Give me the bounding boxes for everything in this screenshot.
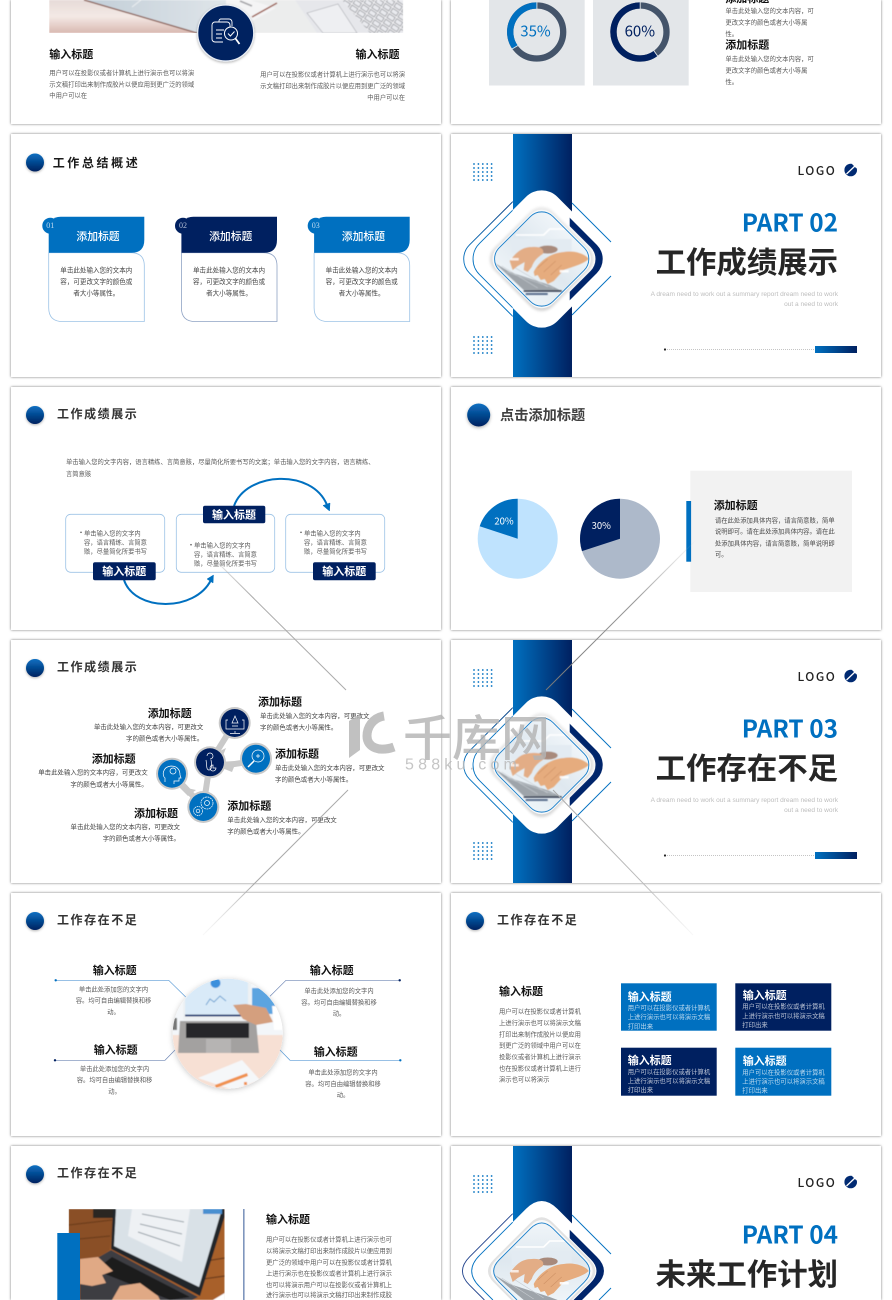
box 2: 容，语言精练、言简意 [194, 549, 257, 558]
card 03: 03 [312, 221, 320, 230]
box: bottom right: 用户可以在投影仪或者计算机 [742, 1067, 825, 1076]
text block: 以将演示文稿打印出来制作成胶片以便应用到 [266, 1246, 392, 1254]
item: top left: 容。均可自由编辑替换和移 [76, 995, 152, 1004]
icon: title bullet [26, 154, 44, 172]
item: top right: 添加标题 [258, 693, 302, 709]
icon: magnifier [248, 750, 264, 767]
text block: 进行演示也可以将演示文稿打印出来制作成胶 [266, 1290, 393, 1298]
item: middle right: 字的颜色或者大小等属性。 [275, 774, 352, 783]
item: top right [301, 962, 377, 1017]
box: top right: 用户可以在投影仪或者计算机 [742, 1001, 825, 1010]
box: bottom right: 打印出来 [742, 1085, 768, 1094]
title: 工作总结概述 [53, 154, 140, 171]
logo text: LOGO [798, 1174, 836, 1191]
icon: head gear [163, 766, 181, 784]
item: bottom left: 字的颜色或者大小等属性。 [103, 833, 180, 842]
item: middle right: 单击此处输入您的文本内容，可更改文 [275, 762, 385, 772]
box 1: 赅，尽量简化所要书写 [84, 546, 147, 555]
item: top right: 输入标题 [310, 962, 354, 978]
photo: laptop on desk [45, 0, 403, 33]
part label: PART 04 [742, 1216, 838, 1252]
item: top left [76, 962, 152, 1016]
box: bottom right: 上进行演示也可以将演示文稿 [742, 1076, 825, 1085]
box: bottom right [735, 1048, 831, 1096]
callout line: bottom left [54, 1050, 175, 1062]
heading: 输入标题 [499, 983, 543, 999]
text block: 到更广泛的领域中用户可以在 [499, 1040, 581, 1049]
item: top right: 单击此处添加您的文字内 [304, 986, 374, 994]
label 1 [93, 562, 156, 580]
callout box: 请在此处添加具体内容，请言简意赅，简单 [715, 515, 835, 524]
text block one: 性。 [726, 28, 738, 38]
part label: PART 02 [742, 204, 838, 240]
item: top right [258, 693, 370, 731]
panel: shortcomings with laptop photo [11, 1146, 441, 1300]
item: bottom left [77, 1041, 153, 1095]
divider [243, 1209, 245, 1300]
box 2 [176, 514, 275, 572]
text block one: 单击此处输入您的文本内容，可 [726, 6, 814, 14]
chart: 20% pie: 20% [494, 513, 514, 527]
heading: 输入标题 [266, 1211, 310, 1227]
item: bottom right: 单击此处添加您的文字内 [308, 1067, 378, 1076]
item: bottom right: 动。 [337, 1090, 349, 1098]
box: top left [621, 983, 717, 1031]
item: bottom left [71, 805, 181, 842]
item: top left: 字的颜色或者大小等属性。 [126, 733, 203, 742]
panel: section divider PART 03 [451, 640, 881, 883]
item: top left: 动。 [107, 1006, 120, 1016]
subtitle: A dream need to work out a summary report dream need to work [651, 796, 839, 804]
box 2: 单击输入您的文字内 [194, 540, 251, 549]
card 02: 者大小等属性。 [206, 287, 252, 297]
item: middle right: 添加标题 [275, 745, 319, 761]
photo: laptop on wood table [69, 1209, 225, 1300]
item: bottom left: 单击此处添加您的文字内 [80, 1064, 149, 1072]
text block: 上进行演示也在投影仪或者计算机上进行演示 [266, 1268, 392, 1277]
card 02 [175, 217, 277, 322]
subtitle: A dream need to work out a summary report dream need to work [651, 290, 839, 298]
text block two: 性。 [726, 76, 738, 86]
box: top left: 输入标题 [628, 988, 672, 1004]
panel: shortcomings with four boxes [451, 893, 881, 1136]
item: bottom left: 单击此处输入您的文本内容，可更改文 [71, 822, 181, 830]
card 01: 者大小等属性。 [73, 287, 119, 297]
card 01: 添加标题 [76, 228, 120, 244]
panel: work results with arrows [11, 387, 441, 630]
callout box [686, 471, 852, 592]
item: bottom right: 输入标题 [314, 1044, 358, 1060]
box: top left: 上进行演示也可以将演示文稿 [628, 1012, 711, 1020]
item: middle left [38, 750, 148, 788]
subtitle: out a need to work [784, 806, 839, 814]
panel: pie charts [451, 387, 881, 630]
title: 工作存在不足 [57, 911, 138, 928]
diamond photo artwork [455, 640, 858, 883]
item: bottom left: 容。均可自由编辑替换和移 [77, 1074, 153, 1084]
item: bottom right: 容。均可自由编辑替换和移 [305, 1078, 381, 1088]
box 1: 单击输入您的文字内 [84, 528, 141, 537]
panel: shortcomings with round photo [11, 893, 441, 1136]
text block: 用户可以在投影仪或者计算机上进行演示也可 [266, 1234, 392, 1243]
box: top left: 打印出来 [628, 1021, 654, 1030]
hub diagram [156, 707, 272, 823]
callout line: bottom right [280, 1050, 401, 1062]
box: top right: 输入标题 [743, 987, 787, 1003]
text block left: 用户可以在投影仪或者计算机上进行演示也可以将演 [49, 68, 194, 76]
intro text: 单击输入您的文字内容，语言精练、言简意赅，尽量简化所要书写的文案；单击输入您的文字内容，语言精练、 [66, 456, 375, 466]
box 3 [286, 514, 385, 572]
label 1: 输入标题 [102, 563, 146, 579]
icon: gears [194, 797, 213, 816]
item: bottom right: 单击此处输入您的文本内容，可更改文 [227, 814, 337, 824]
text block: 也在投影仪或者计算机上进行 [499, 1063, 582, 1072]
item: top left: 单击此处输入您的文本内容，可更改文 [94, 722, 204, 730]
panel: work results hub diagram [11, 640, 441, 883]
item: bottom left: 动。 [108, 1086, 121, 1095]
callout line: top right [270, 979, 401, 996]
text block: 用户可以在投影仪或者计算机 [499, 1006, 582, 1015]
panel: partial donut slide, top right [451, 0, 881, 124]
watermark: brand mark and text: 588ku.com [405, 756, 521, 774]
icon: title bullet [26, 659, 44, 677]
box 1: 容，语言精练、言简意 [84, 537, 147, 546]
chart: 30% pie [580, 499, 660, 579]
item: bottom right [305, 1044, 381, 1098]
chart: 20% pie [478, 499, 558, 579]
box: bottom left [621, 1048, 717, 1096]
section title: 工作成绩展示 [656, 238, 838, 282]
item: top right: 字的颜色或者大小等属性。 [260, 722, 337, 731]
icon: title bullet [466, 912, 484, 930]
box: bottom left: 用户可以在投影仪或者计算机 [628, 1066, 711, 1076]
logo text: LOGO [798, 668, 836, 685]
icon: screen [226, 716, 244, 734]
diamond photo artwork [462, 1146, 858, 1300]
panel: partial report slide, top left [11, 0, 441, 124]
item: middle right [275, 745, 385, 783]
panel: work summary overview [11, 134, 441, 377]
text block: 打印出来制作成胶片以便应用 [499, 1029, 581, 1038]
box: top right: 上进行演示也可以将演示文稿 [742, 1010, 825, 1020]
card 03: 添加标题 [342, 228, 385, 244]
card 03: 者大小等属性。 [339, 287, 385, 297]
chart: 30% pie: 30% [592, 518, 611, 532]
item: top left [94, 705, 204, 742]
item: top left: 单击此处添加您的文字内 [79, 984, 148, 993]
item: middle left: 字的颜色或者大小等属性。 [70, 779, 148, 788]
label 3: 输入标题 [322, 563, 366, 579]
card 03: 容，可更改文字的颜色或 [326, 276, 398, 286]
text block: 也可以将演示用户可以在投影仪或者计算机上 [266, 1280, 392, 1288]
text block one: 更改文字的颜色或者大小等属 [726, 17, 807, 26]
heading right: 输入标题 [356, 46, 400, 62]
text block: 投影仪或者计算机上进行演示 [499, 1052, 581, 1060]
text block: 演示也可以将演示 [499, 1074, 549, 1083]
box 3: 容，语言精练、言简意 [304, 537, 367, 546]
text block: 上进行演示也可以将演示文稿 [499, 1018, 581, 1026]
title: 工作成绩展示 [57, 405, 138, 422]
heading left: 输入标题 [49, 46, 93, 62]
icon: title bullet [467, 403, 490, 427]
card 03: 单击此处输入您的文本内 [326, 265, 398, 275]
intro text: 言简意赅 [66, 468, 92, 478]
part label: PART 03 [742, 710, 838, 746]
text block right: 中用户可以在 [367, 92, 405, 101]
chart: 60% donut: 60% [625, 20, 655, 42]
text block two: 更改文字的颜色或者大小等属 [726, 65, 807, 74]
title: 工作成绩展示 [57, 658, 138, 675]
watermark: diagonal lines [203, 540, 696, 935]
box 1 [66, 514, 165, 572]
card 01: 单击此处输入您的文本内 [60, 265, 132, 275]
section title: 工作存在不足 [656, 744, 838, 788]
text block right: 示文稿打印出来制作成胶片以便应用到更广泛的领域 [260, 80, 406, 90]
text block left: 中用户可以在 [49, 90, 87, 99]
title: 工作存在不足 [497, 911, 578, 928]
text block left: 示文稿打印出来制作成胶片以便应用到更广泛的领域 [49, 79, 195, 88]
item: middle left: 单击此处输入您的文本内容，可更改文 [38, 767, 148, 776]
heading two: 添加标题 [725, 36, 769, 52]
item: top left: 添加标题 [148, 705, 192, 721]
item: middle left: 添加标题 [92, 750, 136, 766]
diamond photo artwork [455, 134, 858, 377]
watermark: brand mark and text: 千库网 [403, 700, 550, 770]
callout box: 添加标题 [714, 497, 758, 513]
text block: 更广泛的领域中用户可以在投影仪或者计算机 [266, 1257, 393, 1266]
card 01 [42, 217, 144, 322]
subtitle: out a need to work [784, 300, 839, 308]
title: 工作存在不足 [57, 1164, 138, 1181]
item: bottom right: 添加标题 [227, 798, 271, 814]
icon: person chart [206, 753, 216, 771]
item: top right: 容。均可自由编辑替换和移 [301, 997, 377, 1006]
panel: section divider PART 04 [451, 1146, 881, 1300]
box: bottom left: 上进行演示也可以将演示文稿 [628, 1076, 711, 1084]
text block right: 用户可以在投影仪或者计算机上进行演示也可以将演 [260, 69, 405, 78]
chart: 35% donut [489, 0, 585, 86]
item: bottom left: 添加标题 [134, 805, 178, 821]
card 02: 单击此处输入您的文本内 [193, 265, 265, 275]
box 3: 单击输入您的文字内 [304, 528, 361, 537]
box: bottom left: 打印出来 [628, 1084, 654, 1094]
box: bottom left: 输入标题 [628, 1052, 672, 1068]
box: top left: 用户可以在投影仪或者计算机 [628, 1002, 711, 1012]
icon: document with magnifier [198, 5, 254, 61]
icon: title bullet [26, 406, 44, 424]
title: 点击添加标题 [500, 405, 585, 425]
callout box: 可。 [715, 549, 728, 558]
card 02: 容，可更改文字的颜色或 [193, 276, 265, 286]
card 02: 02 [179, 221, 187, 230]
item: bottom left: 输入标题 [94, 1041, 138, 1057]
chart: 60% donut [593, 0, 689, 86]
card 03 [308, 217, 410, 322]
card 01: 容，可更改文字的颜色或 [60, 276, 133, 286]
photo: laptop in circle [170, 975, 286, 1095]
text block two: 单击此处输入您的文本内容，可 [726, 54, 814, 62]
icon: title bullet [26, 1165, 44, 1183]
box: top right [735, 983, 831, 1031]
label 2 [203, 506, 265, 523]
label 3 [313, 562, 376, 580]
box 2: 赅，尽量简化所要书写 [194, 558, 257, 567]
section title: 未来工作计划 [656, 1250, 838, 1294]
accent bar [57, 1233, 80, 1300]
arrow: lower curve [124, 575, 214, 604]
item: top left: 输入标题 [93, 962, 137, 978]
box: top right: 打印出来 [742, 1020, 768, 1028]
chart: 35% donut: 35% [520, 20, 551, 42]
icon: title bullet [26, 912, 44, 930]
card 02: 添加标题 [209, 228, 252, 244]
item: bottom right [227, 798, 337, 835]
label 2: 输入标题 [212, 506, 256, 522]
item: bottom right: 字的颜色或者大小等属性。 [227, 826, 305, 835]
callout box: 处添加具体内容，请言简意赅，简单说明即 [715, 538, 835, 547]
panel: section divider PART 02 [451, 134, 881, 377]
callout box: 说明即可。请在此处添加具体内容。请在此 [715, 526, 835, 535]
callout line: top left [54, 979, 186, 997]
arrow: upper curve [234, 479, 330, 511]
item: top right: 动。 [333, 1008, 345, 1017]
box 3: 赅，尽量简化所要书写 [304, 546, 367, 555]
card 01: 01 [46, 221, 54, 230]
logo text: LOGO [798, 162, 836, 179]
box: bottom right: 输入标题 [743, 1053, 787, 1069]
item: top right: 单击此处输入您的文本内容，可更改文 [260, 710, 370, 720]
